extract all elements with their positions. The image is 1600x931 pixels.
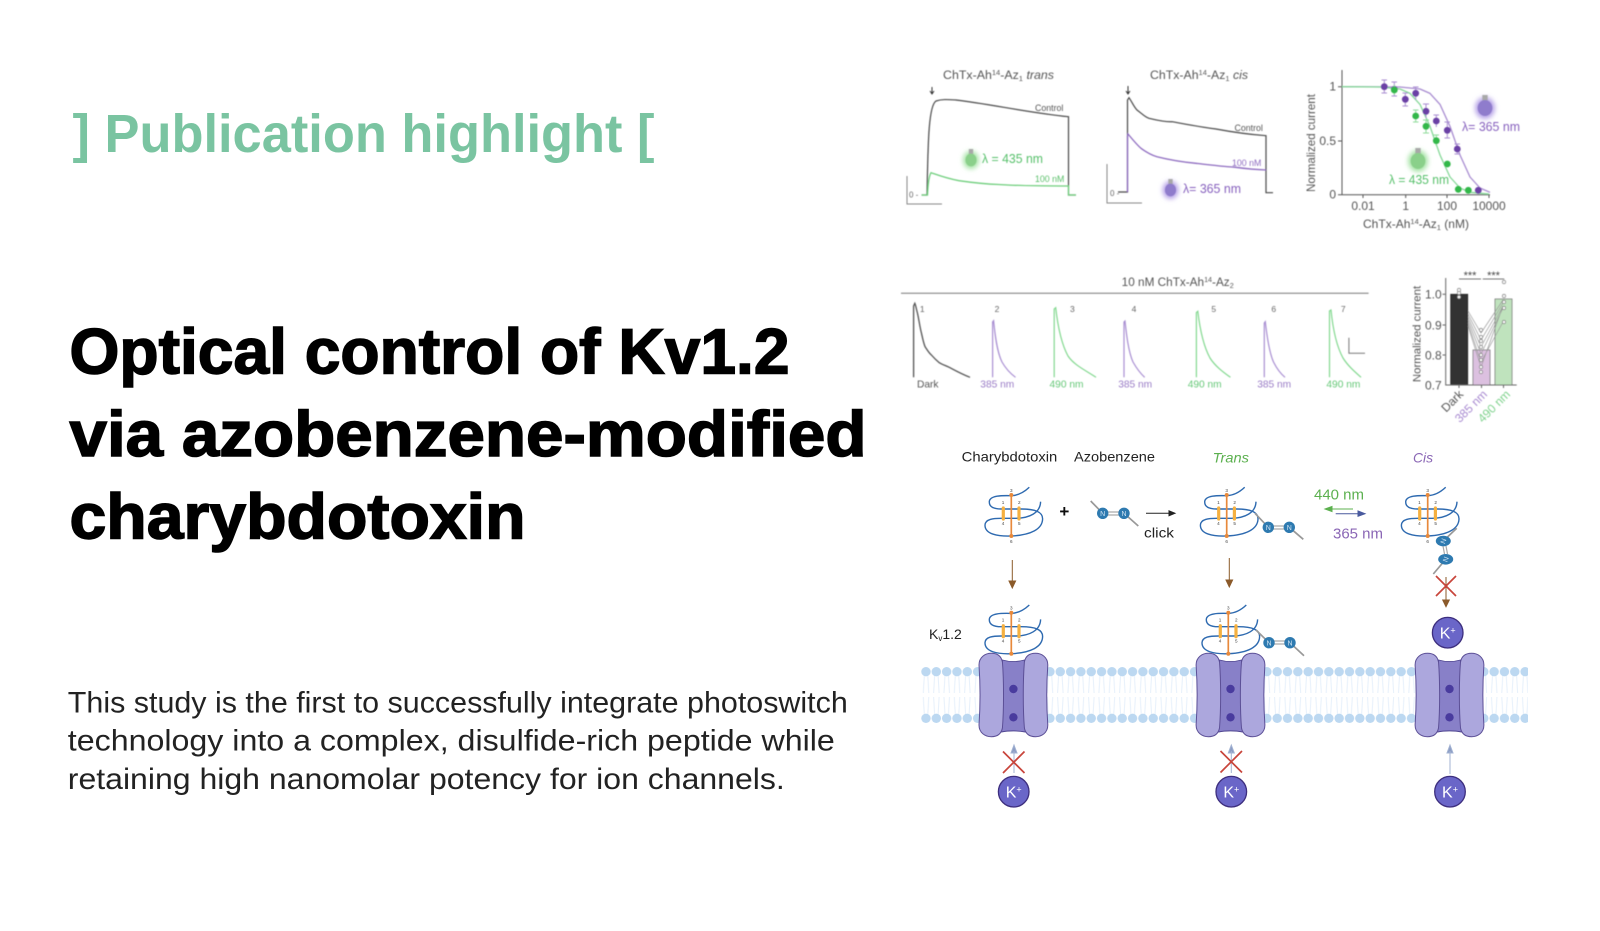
- x axis title: -Az: [1419, 217, 1437, 231]
- x tick labels: [1351, 199, 1506, 213]
- arrow: toxin binds middle: [1226, 558, 1233, 587]
- toxin: free: 1: [1002, 500, 1005, 505]
- toxin with trans azobenzene: 3: [1225, 488, 1228, 493]
- label: 435 nm: λ = 435 nm: [982, 152, 1043, 166]
- heading: cis: cis: [1233, 70, 1248, 82]
- scale bar: [1107, 164, 1142, 203]
- label: 440 nm: 440 nm: [1314, 487, 1364, 503]
- trace labels: 385 nm: [980, 380, 1014, 390]
- toxin: bound left: 5: [1018, 639, 1021, 644]
- scale bar: [907, 176, 942, 204]
- bar: 490 nm: [1495, 299, 1512, 385]
- azobenzene molecule: N: [1100, 511, 1105, 518]
- heading: 10 nM ChTx-Ah: [1122, 277, 1202, 289]
- label: 435 nm: λ = 435 nm: [1389, 173, 1449, 187]
- toxin with cis azobenzene: 1: [1418, 500, 1421, 505]
- y tick labels: [1319, 80, 1336, 202]
- zero label: 0 -: [1110, 189, 1120, 198]
- label: 100 nM: 100 nM: [1035, 174, 1064, 184]
- x axis title: 1: [1437, 223, 1441, 232]
- ion: K+ right: [1435, 776, 1465, 807]
- x tick labels: 10000: [1472, 199, 1506, 213]
- icon: purple bulb: [1475, 95, 1495, 119]
- toxin: bound middle: N: [1287, 640, 1293, 647]
- label: 365 nm: λ= 365 nm: [1462, 120, 1520, 134]
- trace labels: [917, 380, 1360, 390]
- axes: [1338, 70, 1490, 198]
- ion: K+ left: [998, 776, 1029, 807]
- arrow: 365 nm: [1336, 511, 1365, 516]
- trace labels: 385 nm: [1118, 380, 1152, 390]
- toxin: bound middle: 2: [1235, 618, 1238, 623]
- channel: left: [979, 653, 1048, 737]
- title: Optical control of Kv1.2: [70, 315, 790, 387]
- body text: This study is the first to successfully integrate photoswitch: [68, 686, 848, 720]
- label: control: Control: [1234, 123, 1263, 133]
- toxin with cis azobenzene: N: [1440, 538, 1448, 545]
- label: Kv1.2: 1.2: [942, 626, 962, 642]
- trace numbers: 1: [920, 304, 925, 314]
- arrow: click: [1146, 511, 1175, 516]
- arrow: toxin binds left: [1009, 560, 1016, 588]
- trace labels: Dark: [917, 380, 939, 390]
- heading: trans: 14: [992, 70, 1000, 77]
- 100 nM trace: [922, 173, 1076, 195]
- y tick labels: 0.8: [1425, 348, 1442, 362]
- toxin with trans azobenzene: [1200, 487, 1303, 544]
- x tick labels: 100: [1437, 199, 1457, 213]
- toxin with cis azobenzene: 6: [1426, 539, 1429, 544]
- toxin with cis azobenzene: 2: [1434, 500, 1437, 505]
- heading: -Az: [1212, 277, 1230, 289]
- ion: K+ left: K: [1006, 784, 1016, 802]
- y tick labels: 0.7: [1425, 378, 1442, 392]
- ion: K+ middle: [1216, 776, 1247, 807]
- y tick labels: 0: [1329, 188, 1336, 202]
- significance markers: ***: [1487, 270, 1501, 282]
- trace numbers: 3: [1070, 304, 1075, 314]
- purple data points: [1381, 80, 1482, 194]
- label: Azobenzene: Azobenzene: [1074, 449, 1155, 465]
- arrow: ion flux middle: [1228, 745, 1234, 773]
- bar: dark: [1451, 294, 1468, 385]
- trace: 490 nm: [1054, 308, 1096, 377]
- trace numbers: 7: [1341, 304, 1346, 314]
- toxin: bound middle: 5: [1235, 639, 1238, 644]
- toxin: bound left: 1: [1002, 618, 1005, 623]
- trace labels: 490 nm: [1050, 380, 1083, 390]
- trace: 385 nm: [1124, 321, 1145, 377]
- azobenzene molecule: [1091, 501, 1138, 526]
- x labels: 385 nm: [1452, 387, 1490, 425]
- membrane: [921, 660, 1528, 730]
- scale bar: [1349, 338, 1365, 353]
- y tick labels: 1: [1329, 80, 1336, 94]
- trace numbers: 2: [995, 304, 1000, 314]
- trace labels: 490 nm: [1326, 380, 1360, 390]
- trace labels: 385 nm: [1257, 380, 1291, 390]
- ion: K+ above right channel: [1432, 617, 1463, 648]
- label: 365 nm: λ= 365 nm: [1183, 182, 1241, 196]
- y tick labels: [1425, 288, 1442, 392]
- icon: green bulb: [1408, 148, 1428, 172]
- panel: repeated light-switching traces: [901, 277, 1369, 390]
- toxin with cis azobenzene: 4: [1418, 521, 1421, 526]
- channel: middle: [1196, 653, 1265, 737]
- y axis title: Normalized current: [1305, 93, 1318, 192]
- channel: right: [1415, 653, 1484, 737]
- heading: trans: 1: [1019, 76, 1023, 83]
- trace numbers: 4: [1132, 304, 1137, 314]
- body text: [68, 686, 848, 796]
- label: Trans: Trans: [1213, 450, 1249, 466]
- heading: trans: -Az: [1000, 70, 1019, 82]
- label: 100 nM: 100 nM: [1232, 158, 1261, 168]
- trace: 385 nm: [1264, 322, 1285, 377]
- heading: trans: trans: [1026, 70, 1054, 82]
- body text: technology into a complex, disulfide-rich peptide while: [68, 724, 835, 758]
- trace: 385 nm: [993, 321, 1016, 377]
- arrow: ion flux right: [1447, 745, 1453, 774]
- heading: 14: [1204, 277, 1212, 284]
- toxin: free: 6: [1010, 539, 1013, 544]
- arrow: toxin blocked right: [1443, 577, 1449, 607]
- label: Kv1.2: v: [938, 634, 942, 643]
- label: Charybdotoxin: Charybdotoxin: [962, 449, 1057, 465]
- toxin with cis azobenzene: 3: [1426, 488, 1429, 493]
- heading: 2: [1230, 283, 1234, 290]
- purple curve: [1342, 87, 1490, 192]
- trace numbers: 5: [1211, 304, 1216, 314]
- ion: K+ left: +: [1016, 784, 1022, 794]
- toxin with cis azobenzene: N: [1442, 556, 1451, 563]
- cross: ion blocked middle: [1220, 751, 1242, 772]
- ion: K+ right: K: [1442, 784, 1453, 802]
- toxin: free: 2: [1018, 500, 1021, 505]
- toxin with trans azobenzene: 2: [1233, 500, 1236, 505]
- control trace: [1118, 98, 1273, 193]
- toxin with trans azobenzene: 1: [1217, 500, 1220, 505]
- body text: retaining high nanomolar potency for ion channels.: [68, 763, 785, 796]
- toxin: free: 4: [1002, 521, 1005, 526]
- cross: toxin blocked: [1436, 576, 1456, 596]
- title: charybdotoxin: [70, 480, 526, 552]
- label: 365 nm: 365 nm: [1333, 526, 1383, 542]
- panel: cis current traces: [1107, 70, 1273, 203]
- toxin: bound middle: 3: [1227, 606, 1230, 611]
- heading: cis: 1: [1225, 76, 1230, 83]
- x axis title: 14: [1410, 217, 1419, 226]
- 100 nM trace: [1128, 134, 1266, 192]
- toxin: bound middle: 4: [1219, 639, 1222, 644]
- x axis title: (nM): [1441, 217, 1469, 231]
- icon: purple bulb: [1162, 179, 1178, 199]
- toxin with cis azobenzene: [1401, 487, 1459, 574]
- y tick labels: 0.9: [1425, 318, 1442, 332]
- azobenzene molecule: N: [1121, 511, 1127, 518]
- zero label: 0 -: [909, 190, 919, 200]
- axes: [1442, 278, 1517, 388]
- label: Kv1.2: K: [929, 626, 938, 642]
- toxin with cis azobenzene: 5: [1434, 521, 1437, 526]
- plus sign: +: [1059, 502, 1069, 521]
- trace numbers: [920, 304, 1346, 314]
- trace labels: 490 nm: [1188, 380, 1222, 390]
- toxin: bound left: 3: [1010, 606, 1013, 611]
- heading: cis: -Az: [1207, 70, 1226, 82]
- toxin: bound middle: N: [1266, 640, 1272, 647]
- paired lines: [1468, 300, 1503, 367]
- panel: trans current traces: [907, 70, 1076, 204]
- x labels: [1438, 387, 1513, 425]
- ion: K+ middle: K: [1223, 784, 1234, 802]
- arrow: 440 nm: [1325, 506, 1353, 512]
- label: Cis: Cis: [1413, 450, 1433, 466]
- green curve: [1342, 87, 1489, 194]
- toxin with trans azobenzene: N: [1287, 525, 1292, 532]
- green data points: [1391, 85, 1472, 194]
- section label: Publication highlight: ] Publication highlight [: [72, 104, 655, 164]
- chart: dose-response curves: [1305, 70, 1520, 232]
- heading: cis: 14: [1199, 70, 1207, 77]
- y axis title: Normalized current: [1412, 285, 1424, 382]
- trace: 490 nm: [1330, 310, 1361, 377]
- label: click: click: [1144, 525, 1175, 541]
- ion: K+ above right channel: +: [1450, 626, 1456, 636]
- significance markers: ***: [1464, 270, 1477, 282]
- significance markers: [1459, 270, 1504, 282]
- y tick labels: 0.5: [1319, 134, 1336, 148]
- toxin: bound left: 2: [1018, 618, 1021, 623]
- ion: K+ right: +: [1453, 784, 1458, 794]
- trace: dark: [914, 303, 970, 377]
- toxin with trans azobenzene: 6: [1225, 539, 1228, 544]
- arrow: application: [930, 87, 934, 94]
- bar: 385 nm: [1473, 350, 1490, 385]
- arrow: ion flux left: [1011, 745, 1017, 773]
- x labels: Dark: [1438, 387, 1467, 415]
- x labels: 490 nm: [1475, 387, 1513, 425]
- chart: normalized current bars: [1412, 270, 1517, 425]
- ion: K+ middle: +: [1234, 784, 1239, 794]
- x tick labels: 1: [1402, 199, 1409, 213]
- title: [70, 315, 866, 552]
- label: control: Control: [1035, 103, 1063, 113]
- control trace: [922, 100, 1076, 195]
- icon: green bulb: [963, 149, 979, 169]
- data points: [1457, 280, 1506, 374]
- toxin: bound middle: [1202, 605, 1304, 656]
- toxin: bound middle: 1: [1219, 618, 1222, 623]
- heading: trans: ChTx-Ah: [943, 70, 988, 82]
- toxin with trans azobenzene: 4: [1217, 521, 1220, 526]
- ion: K+ above right channel: K: [1440, 626, 1450, 642]
- panel: mechanism schematic: [921, 449, 1528, 807]
- y tick labels: 1.0: [1425, 288, 1442, 302]
- toxin: free: 5: [1018, 521, 1021, 526]
- trace: 490 nm: [1196, 311, 1230, 377]
- toxin with trans azobenzene: N: [1266, 525, 1271, 532]
- cross: ion blocked left: [1003, 752, 1024, 773]
- heading: cis: ChTx-Ah: [1150, 70, 1195, 82]
- toxin: free: 3: [1010, 488, 1013, 493]
- x axis title: ChTx-Ah: [1363, 217, 1410, 231]
- toxin: bound left: [985, 605, 1043, 656]
- trace numbers: 6: [1271, 304, 1276, 314]
- title: via azobenzene-modified: [70, 398, 866, 470]
- toxin: free: [985, 487, 1043, 544]
- heading rule: [901, 292, 1369, 294]
- x tick labels: 0.01: [1351, 199, 1375, 213]
- toxin: bound left: 4: [1002, 639, 1005, 644]
- toxin with trans azobenzene: 5: [1233, 521, 1236, 526]
- arrow: application: [1126, 86, 1130, 94]
